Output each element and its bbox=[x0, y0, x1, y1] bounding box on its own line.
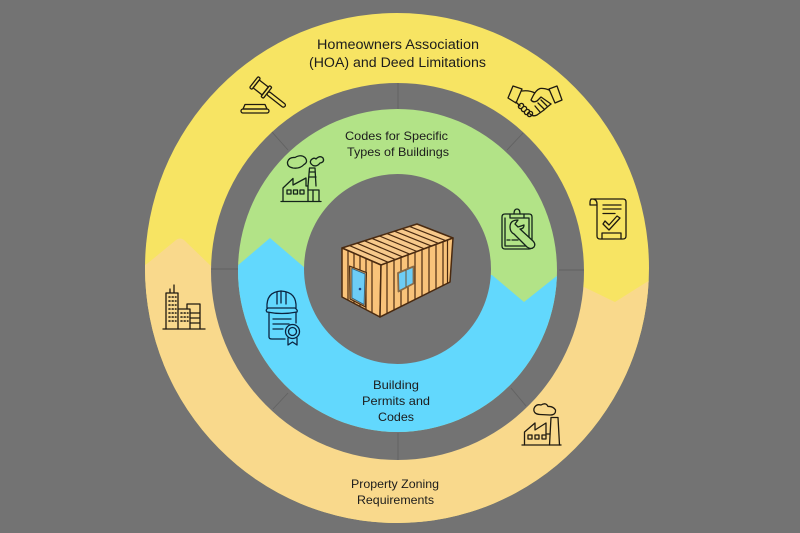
heading: codes for specific types of buildings: Types of Buildings bbox=[347, 145, 449, 159]
heading: building permits and codes: Building bbox=[373, 378, 419, 392]
centre hole bbox=[304, 174, 491, 364]
container left wall bbox=[342, 248, 381, 317]
icon: shipping container home bbox=[342, 224, 453, 317]
gap between rings bbox=[211, 83, 584, 460]
heading: codes for specific types of buildings bbox=[345, 129, 449, 159]
icon: hard hat and certificate bbox=[266, 291, 300, 345]
panel: outer ring bbox=[130, 13, 660, 530]
icon: factory (orange ring) bbox=[522, 404, 561, 445]
heading: property zoning requirements: Requirements bbox=[357, 493, 434, 507]
icon: handshake bbox=[508, 86, 562, 117]
container door bbox=[350, 266, 366, 307]
segment: building permits (blue) bbox=[230, 238, 565, 440]
icon: factory with smoke (green ring) bbox=[281, 156, 324, 202]
heading: building permits and codes bbox=[362, 378, 430, 424]
container roof bbox=[342, 224, 453, 265]
heading: building permits and codes: Codes bbox=[378, 410, 414, 424]
segment: specific building codes (green) bbox=[238, 109, 557, 432]
heading: homeowners association: Homeowners Association bbox=[317, 37, 479, 52]
heading: property zoning requirements bbox=[351, 477, 439, 507]
heading: homeowners association bbox=[309, 37, 486, 70]
heading: codes for specific types of buildings: Codes for Specific bbox=[345, 129, 448, 143]
icon: document with checkmark bbox=[590, 199, 626, 239]
heading: property zoning requirements: Property Zoning bbox=[351, 477, 439, 491]
container window bbox=[398, 266, 414, 292]
segment: property zoning (orange) bbox=[130, 238, 660, 530]
icon: clipboard with wrench bbox=[502, 209, 535, 249]
panel: inner ring bbox=[230, 109, 565, 440]
heading: building permits and codes: Permits and bbox=[362, 394, 430, 408]
icon: gavel bbox=[241, 77, 289, 113]
segment: homeowners association (yellow) bbox=[145, 13, 649, 523]
container right wall bbox=[380, 238, 453, 317]
heading: homeowners association: (HOA) and Deed Limitations bbox=[309, 55, 486, 70]
icon: city buildings bbox=[163, 285, 205, 329]
